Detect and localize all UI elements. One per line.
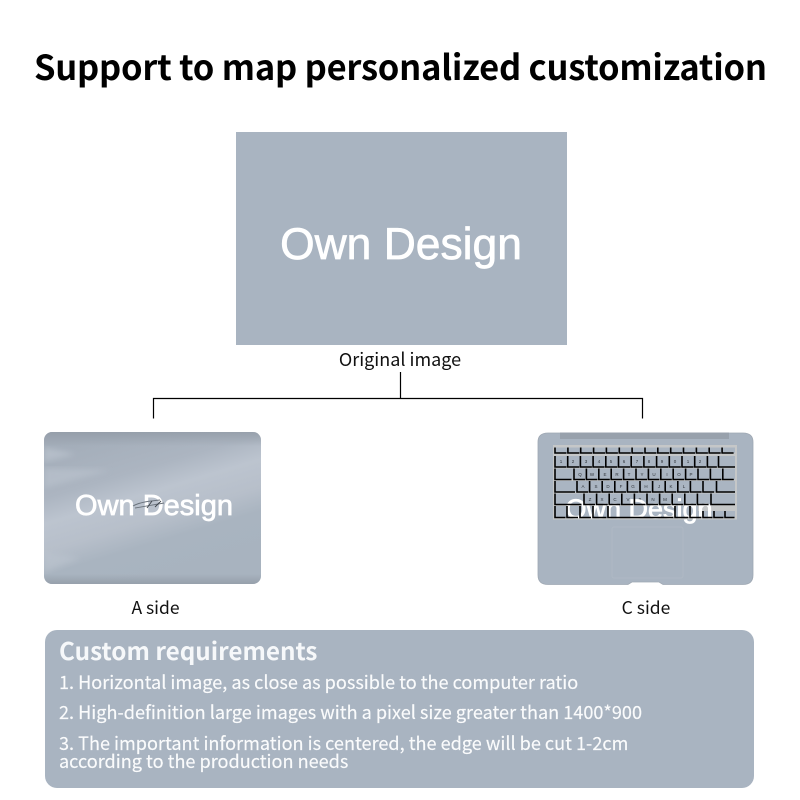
A side laptop lid: Own Design xyxy=(75,490,233,522)
keyboard legends: QWERTYUIOP xyxy=(578,472,693,477)
requirement 3: according to the production needs xyxy=(59,748,348,774)
label: C side: C side xyxy=(622,595,670,620)
key edges xyxy=(555,448,735,518)
keys xyxy=(555,448,735,518)
keyboard tray xyxy=(553,445,737,520)
icon: small logo on lid xyxy=(133,500,164,508)
panel heading: Custom requirements xyxy=(59,632,317,667)
keyboard legends xyxy=(560,459,702,502)
requirement 3: 3. The important information is centered, the edge will be cut 1-2cm xyxy=(59,730,628,756)
connector lines xyxy=(154,372,642,418)
A side laptop lid xyxy=(44,432,261,584)
keyboard legends: 123456789012 xyxy=(560,459,702,464)
artwork across keyboard: Own Design xyxy=(565,494,713,524)
title: Support to map personalized customization xyxy=(34,40,767,90)
original image panel: Own Design xyxy=(280,220,522,269)
C side laptop keyboard deck xyxy=(538,432,753,584)
label: A side: A side xyxy=(131,595,180,620)
keyboard legends: ZXCVBNM xyxy=(589,497,667,502)
requirement 2: 2. High-definition large images with a pixel size greater than 1400*900 xyxy=(59,699,642,725)
label: original image: Original image xyxy=(339,346,461,372)
requirement 1: 1. Horizontal image, as close as possible to the computer ratio xyxy=(59,669,578,695)
original image panel xyxy=(236,132,567,345)
keyboard legends: ASDFGHJKL xyxy=(581,484,686,489)
hinge xyxy=(560,432,729,439)
custom requirements panel xyxy=(45,630,754,788)
trackpad xyxy=(612,527,683,578)
